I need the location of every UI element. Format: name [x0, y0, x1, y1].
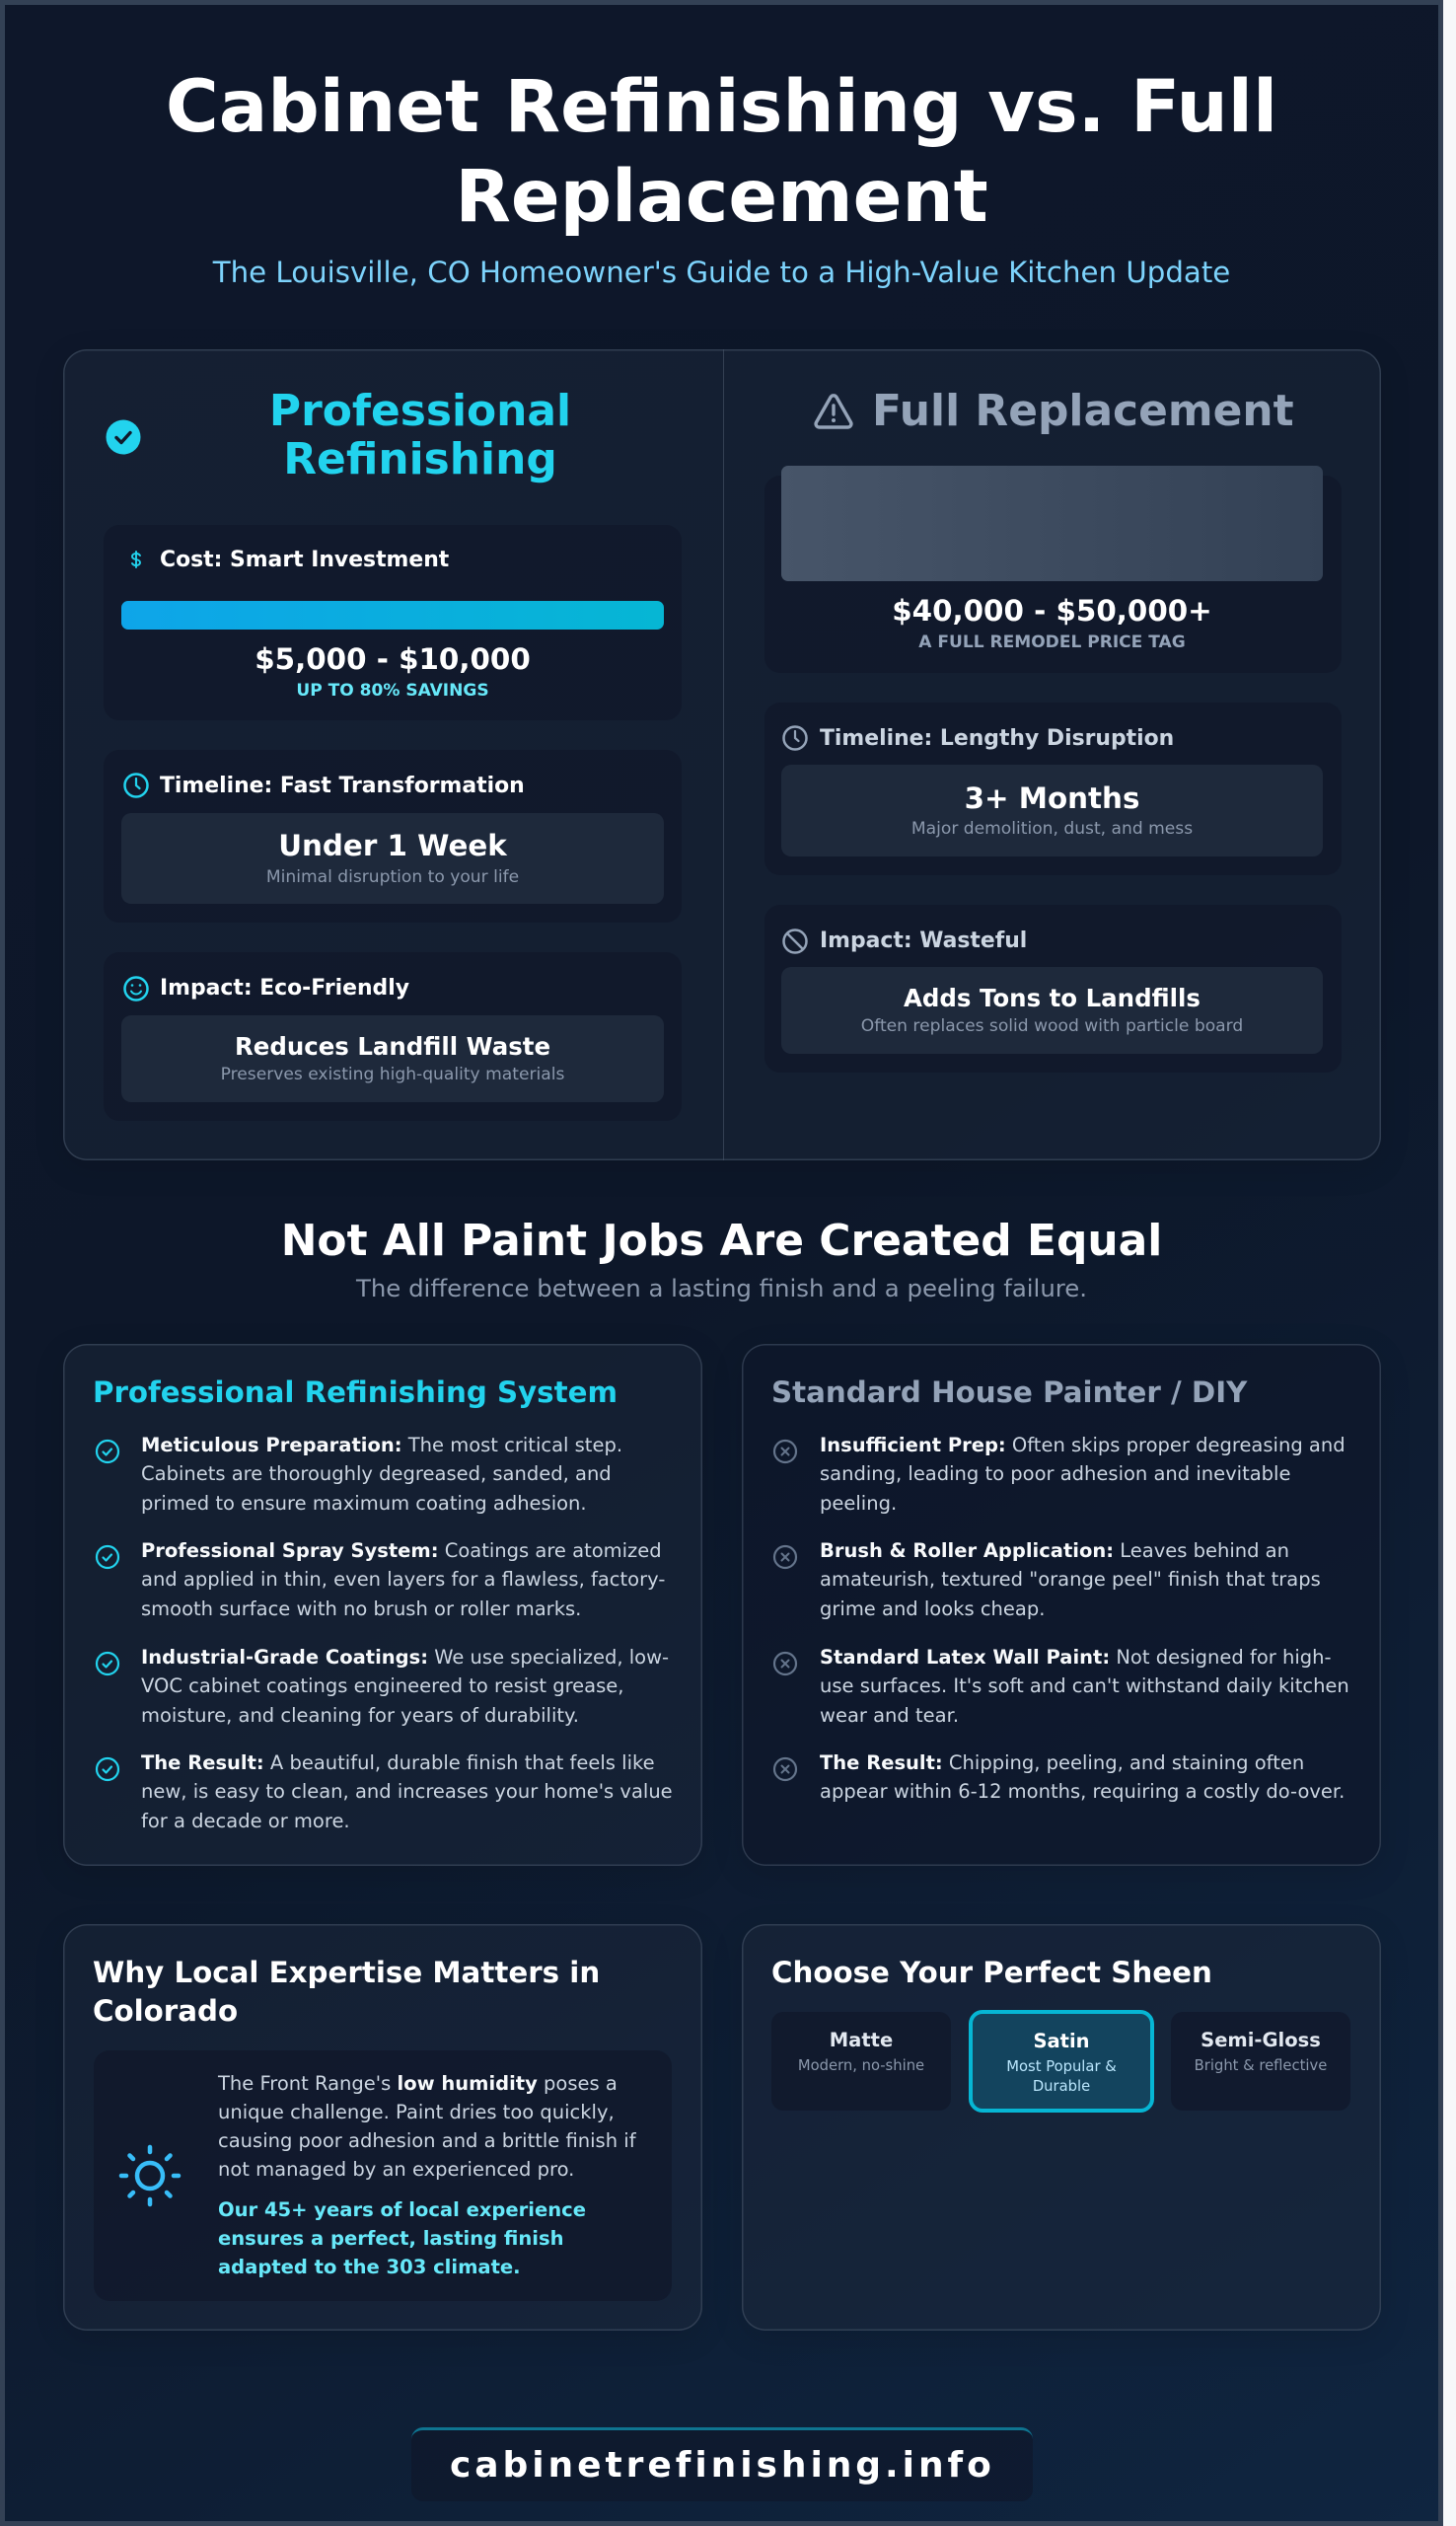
list item: prep [773, 1434, 1346, 1515]
callout highlight [218, 2198, 586, 2278]
item text: Brush & Roller Application: Leaves behind an [820, 1539, 1289, 1562]
icon: dollar [131, 551, 141, 568]
list item: spray system [95, 1539, 665, 1620]
icon: slash circle [782, 929, 808, 954]
item text: Standard Latex Wall Paint: Not designed for high- [820, 1646, 1332, 1669]
item text: VOC cabinet coatings engineered to resist grease, [141, 1674, 623, 1697]
card: impact [104, 952, 682, 1121]
item text: Industrial-Grade Coatings: We use specialized, low- [141, 1646, 669, 1669]
item text: The Result: Chipping, peeling, and staining often [820, 1751, 1304, 1774]
section subheading: The difference between a lasting finish and a peeling failure. [356, 1274, 1087, 1302]
heading text [269, 385, 571, 484]
tile note: Durable [1033, 2078, 1090, 2094]
list item: coatings [95, 1646, 669, 1727]
cost bar [121, 601, 664, 630]
list item: brush and roller [773, 1539, 1321, 1620]
title [166, 65, 1277, 239]
callout text: The Front Range's low humidity poses a [218, 2072, 618, 2094]
item text: use surfaces. It's soft and can't withstand daily kitchen [820, 1674, 1349, 1697]
item text [141, 1539, 665, 1620]
item text: Insufficient Prep: Often skips proper degreasing and [820, 1434, 1346, 1456]
value box [121, 1015, 664, 1102]
panel: comparison [63, 349, 1381, 1160]
item text [141, 1646, 669, 1727]
item text: Meticulous Preparation: The most critical step. [141, 1434, 622, 1456]
item text [820, 1434, 1346, 1515]
column heading: full replacement [814, 386, 1294, 436]
callout highlight: ensures a perfect, lasting finish [218, 2227, 564, 2250]
heading text: Refinishing [283, 434, 557, 484]
panel: professional refinishing system [63, 1344, 702, 1866]
value box [121, 813, 664, 904]
title: Cabinet Refinishing vs. Full [166, 65, 1277, 149]
icon: warning triangle [814, 394, 853, 429]
heading text: Full Replacement [872, 386, 1294, 436]
panel heading: Standard House Painter / DIY [771, 1375, 1247, 1409]
item text: The Result: A beautiful, durable finish that feels like [141, 1751, 655, 1774]
tile: semi-gloss [1171, 2012, 1350, 2111]
item text: Professional Spray System: Coatings are atomized [141, 1539, 662, 1562]
card: timeline [764, 703, 1342, 875]
section heading: Not All Paint Jobs Are Created Equal [281, 1216, 1162, 1266]
icon: check circle [95, 1545, 120, 1569]
callout text: not managed by an experienced pro. [218, 2158, 574, 2181]
tile name: Matte [830, 2029, 893, 2051]
card title: Timeline: Lengthy Disruption [820, 726, 1174, 750]
item text: appear within 6-12 months, requiring a costly do-over. [820, 1780, 1345, 1803]
callout: climate [94, 2050, 672, 2301]
card: cost [764, 476, 1342, 673]
item text: smooth surface with no brush or roller marks. [141, 1597, 581, 1620]
tile: satin [969, 2010, 1154, 2113]
item text: Cabinets are thoroughly degreased, sanded, and [141, 1462, 612, 1485]
item text [820, 1646, 1349, 1727]
item text: moisture, and cleaning for years of durability. [141, 1704, 579, 1727]
item text: for a decade or more. [141, 1810, 350, 1832]
icon: x circle [773, 1439, 797, 1464]
card: impact [764, 905, 1342, 1073]
item text: and applied in thin, even layers for a flawless, factory- [141, 1568, 665, 1591]
price note: A FULL REMODEL PRICE TAG [918, 632, 1186, 651]
panel: local expertise [63, 1924, 702, 2331]
callout highlight: Our 45+ years of local experience [218, 2198, 586, 2220]
heading text: Professional [269, 385, 571, 436]
tile name: Semi-Gloss [1201, 2029, 1321, 2051]
note: Often replaces solid wood with particle board [861, 1016, 1243, 1036]
panel heading: Choose Your Perfect Sheen [771, 1956, 1212, 1989]
icon: check circle [95, 1756, 120, 1782]
callout text [217, 2072, 636, 2181]
price: $40,000 - $50,000+ [892, 594, 1212, 628]
icon: clock [123, 773, 149, 798]
value: Adds Tons to Landfills [904, 984, 1201, 1012]
item text [141, 1434, 622, 1515]
item text: new, is easy to clean, and increases your home's value [141, 1780, 673, 1803]
note: Preserves existing high-quality materials [221, 1065, 564, 1084]
list item: result [773, 1751, 1345, 1803]
tile: matte [771, 2012, 951, 2111]
icon: check circle [95, 1652, 120, 1675]
callout text: unique challenge. Paint dries too quickly, [218, 2101, 615, 2123]
item text [820, 1751, 1345, 1803]
item text: amateurish, textured "orange peel" finish that traps [820, 1568, 1321, 1591]
panel heading [93, 1956, 600, 2028]
cost bar [781, 466, 1323, 581]
icon: x circle [773, 1652, 797, 1675]
note: Minimal disruption to your life [266, 866, 519, 886]
title: Replacement [455, 155, 988, 239]
tile name: Satin [1033, 2030, 1090, 2052]
icon: check circle [95, 1439, 120, 1464]
tile note [973, 2057, 1150, 2096]
value: Reduces Landfill Waste [235, 1032, 550, 1060]
panel heading: Colorado [93, 1994, 238, 2028]
panel: standard house painter [742, 1344, 1381, 1866]
callout text: causing poor adhesion and a brittle finish if [218, 2129, 636, 2152]
column heading: professional refinishing [107, 385, 571, 484]
icon: clock [782, 725, 808, 751]
tile note: Modern, no-shine [798, 2057, 924, 2074]
value box [781, 967, 1323, 1054]
item text: sanding, leading to poor adhesion and inevitable [820, 1462, 1290, 1485]
icon: x circle [773, 1756, 797, 1782]
list item: latex paint [773, 1646, 1349, 1727]
subtitle: The Louisville, CO Homeowner's Guide to a High-Value Kitchen Update [213, 255, 1230, 288]
card title: Impact: Eco-Friendly [160, 975, 409, 1001]
icon: sun [118, 2145, 182, 2206]
footer url: cabinetrefinishing.info [450, 2445, 995, 2485]
card title: Impact: Wasteful [820, 928, 1027, 953]
card title: Timeline: Fast Transformation [160, 774, 525, 797]
note: Major demolition, dust, and mess [911, 819, 1193, 839]
item text [141, 1751, 673, 1832]
item text: primed to ensure maximum coating adhesion. [141, 1492, 587, 1515]
item text [820, 1539, 1321, 1620]
icon: check badge [107, 420, 140, 454]
price: $5,000 - $10,000 [255, 641, 531, 675]
column: professional refinishing [63, 349, 724, 1160]
panel: sheen chooser [742, 1924, 1381, 2331]
value: Under 1 Week [278, 829, 507, 862]
item text: peeling. [820, 1492, 897, 1515]
item text: grime and looks cheap. [820, 1597, 1045, 1620]
card: cost [104, 525, 682, 720]
card title: Cost: Smart Investment [160, 547, 449, 572]
list item: preparation [95, 1434, 622, 1515]
panel heading: Professional Refinishing System [93, 1375, 618, 1409]
panel heading: Why Local Expertise Matters in [93, 1956, 600, 1989]
tile note: Most Popular & [1006, 2058, 1117, 2075]
item text: wear and tear. [820, 1704, 959, 1727]
value: 3+ Months [965, 781, 1139, 815]
tile note: Bright & reflective [1195, 2057, 1327, 2074]
callout highlight: adapted to the 303 climate. [218, 2256, 521, 2278]
list item: result [95, 1751, 673, 1832]
footer url box [411, 2427, 1033, 2501]
icon: smile [123, 976, 149, 1002]
savings note: UP TO 80% SAVINGS [296, 681, 489, 701]
column: full replacement [781, 386, 1323, 1054]
icon: x circle [773, 1545, 797, 1569]
card: timeline [104, 750, 682, 923]
value box [781, 765, 1323, 856]
